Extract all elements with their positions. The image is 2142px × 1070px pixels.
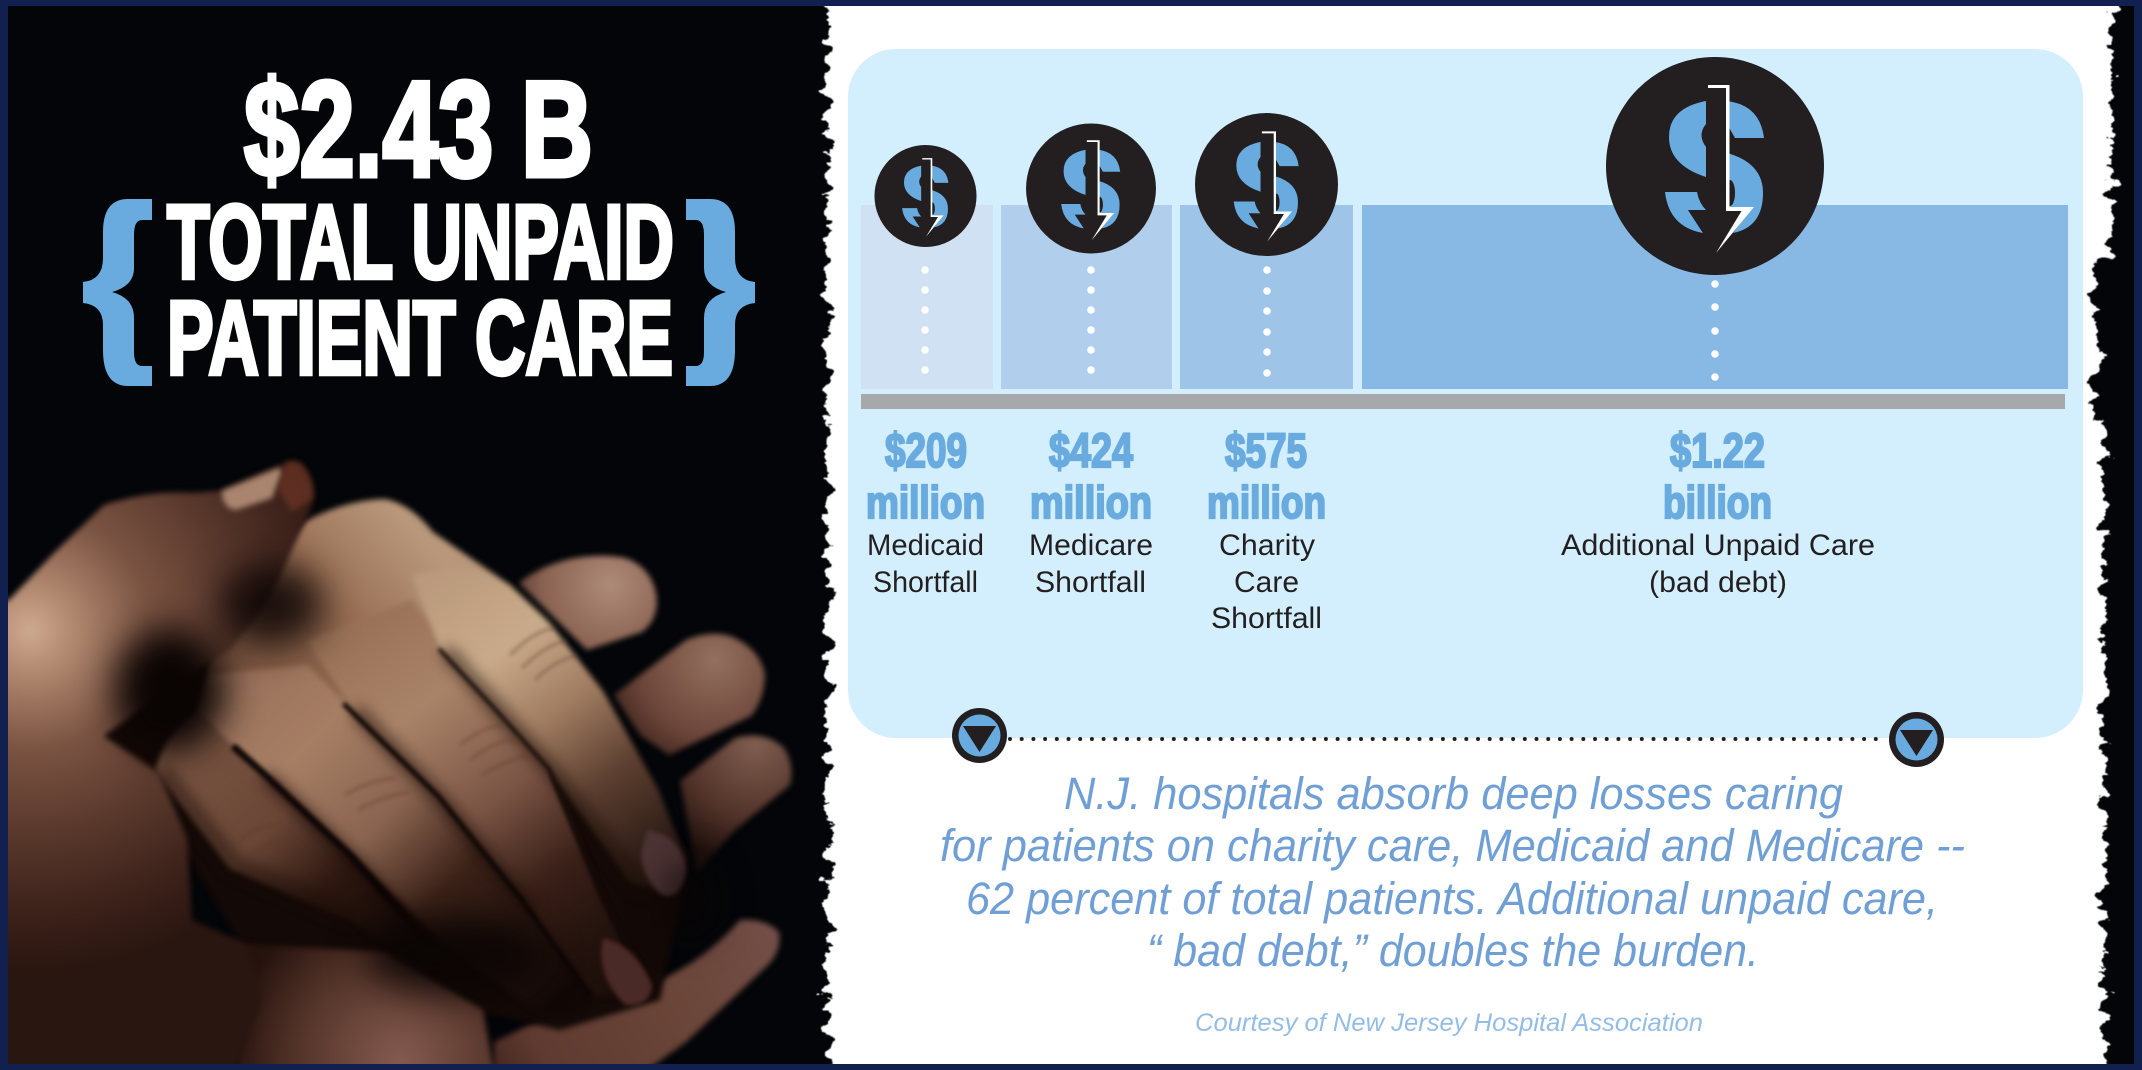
- label: Charity care shortfall: Charity: [1219, 529, 1315, 562]
- photo: clasped hands: [0, 461, 792, 1070]
- label: Medicaid shortfall: million: [866, 477, 985, 528]
- left brace: [83, 199, 152, 386]
- shadows: [115, 563, 715, 993]
- label: Charity care shortfall: $575: [1225, 425, 1307, 478]
- heading: total: [83, 53, 755, 397]
- nails: [642, 830, 686, 896]
- right brace: [686, 199, 755, 386]
- baseline: [861, 394, 2065, 409]
- bar: Medicaid: [861, 205, 993, 389]
- summary text: 62 percent of total patients. Additional unpaid care,: [966, 873, 1938, 924]
- summary text: “ bad debt,” doubles the burden.: [1147, 925, 1759, 976]
- icon: dollar with down arrow, Medicaid: [874, 145, 977, 247]
- label: Charity care shortfall: Shortfall: [1211, 602, 1322, 635]
- label: Additional unpaid care: (bad debt): [1649, 566, 1787, 599]
- torn white paper panel: [827, 0, 2112, 1070]
- title line 2: PATIENT CARE: [167, 280, 673, 397]
- icon: dollar with down arrow, Charity care: [1195, 113, 1338, 256]
- label: Medicare shortfall: $424: [1049, 425, 1133, 478]
- bar: Charity care: [1180, 205, 1353, 389]
- knuckle creases: [346, 626, 574, 810]
- summary text: [940, 768, 1965, 976]
- label: Medicare shortfall: million: [1030, 477, 1152, 528]
- label: Additional unpaid care: Additional Unpaid Care: [1561, 529, 1875, 562]
- label: Medicare shortfall: Shortfall: [1035, 566, 1146, 599]
- title amount: $2.43 B: [244, 53, 593, 205]
- icon: dollar with down arrow, Medicare: [1026, 124, 1156, 253]
- label: Medicaid shortfall: [866, 425, 985, 599]
- finger shading: [165, 655, 640, 945]
- label: Charity care shortfall: million: [1207, 477, 1326, 528]
- icon: dollar with down arrow, Additional unpaid care: [1606, 57, 1824, 275]
- bar: Additional unpaid care: [1362, 205, 2068, 389]
- thumb hand: [0, 461, 313, 1070]
- label: Medicare shortfall: [1029, 425, 1153, 599]
- finger gaps: [235, 650, 640, 995]
- label: Charity care shortfall: Care: [1234, 566, 1299, 599]
- label: Medicaid shortfall: Shortfall: [873, 566, 978, 599]
- label: Medicaid shortfall: Medicaid: [867, 529, 984, 562]
- label: Additional unpaid care: billion: [1663, 477, 1772, 528]
- label: Additional unpaid care: $1.22: [1670, 425, 1765, 478]
- summary text: N.J. hospitals absorb deep losses caring: [1064, 768, 1843, 819]
- label: Medicaid shortfall: $209: [885, 425, 967, 478]
- source credit: Courtesy of New Jersey Hospital Association: [1195, 1009, 1703, 1037]
- dotted connectors: bars: [921, 266, 1719, 381]
- summary text: for patients on charity care, Medicaid and Medicare --: [940, 820, 1965, 871]
- bar chart: [861, 205, 2068, 409]
- icon: left arrow marker: [952, 708, 1007, 763]
- label: Medicare shortfall: Medicare: [1029, 529, 1153, 562]
- label: Additional unpaid care: [1561, 425, 1875, 599]
- bar: Medicare: [1001, 205, 1172, 389]
- icon: right arrow marker: [1889, 712, 1944, 767]
- label: Charity care shortfall: [1207, 425, 1326, 635]
- panel: light blue chart background: [848, 49, 2083, 738]
- dotted timeline: [1010, 737, 1886, 741]
- title line 1: TOTAL UNPAID: [167, 184, 674, 301]
- base dark under fingers: [110, 725, 676, 1033]
